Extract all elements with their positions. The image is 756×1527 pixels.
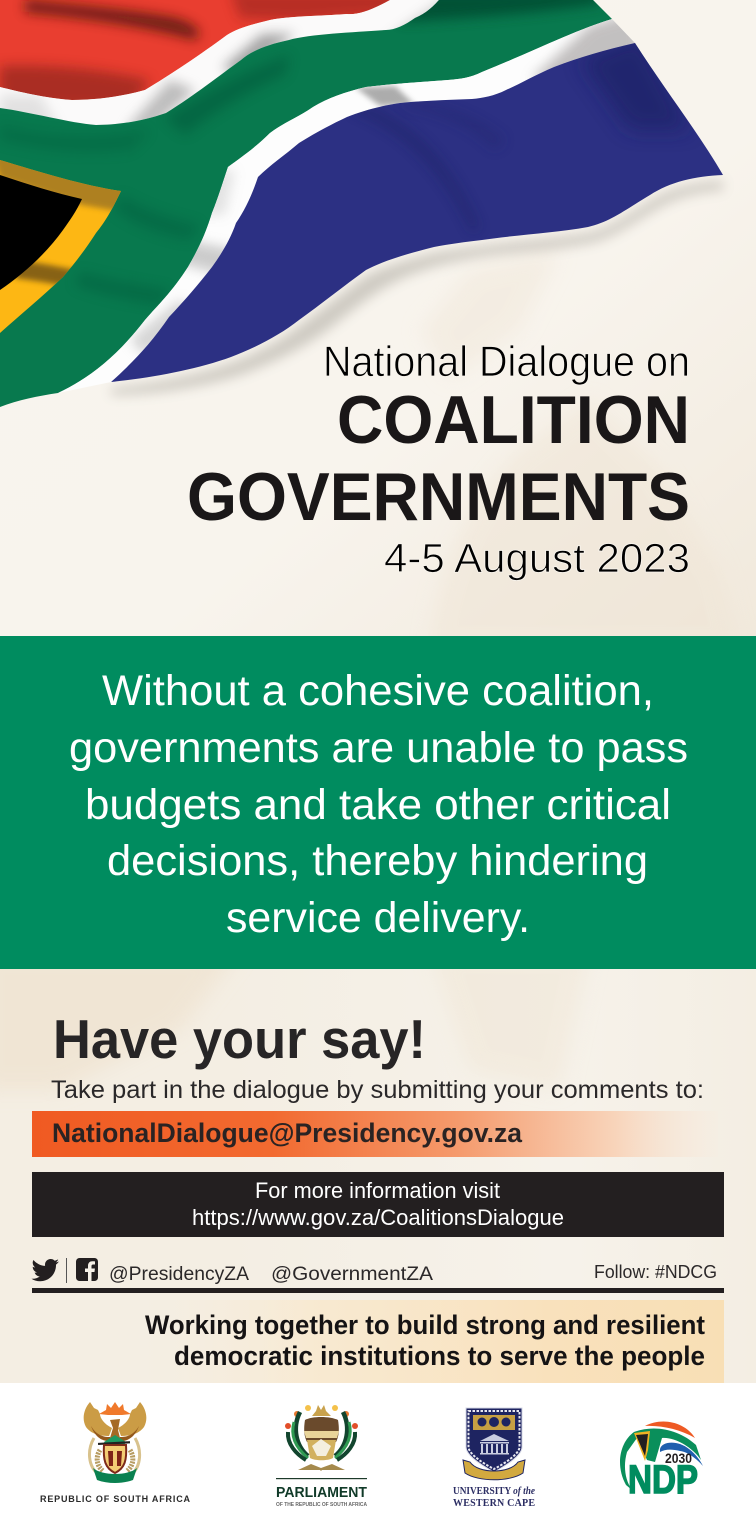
slogan line 1: Working together to build strong and resilient [145, 1310, 705, 1340]
parliament rule [276, 1478, 367, 1479]
statement text: Without a cohesive coalition, [102, 667, 654, 715]
uwc name line 2: WESTERN CAPE [453, 1498, 535, 1509]
panel: logos footer [0, 1383, 756, 1527]
flag: lower white stripe [58, 19, 635, 393]
arms bird [110, 1419, 120, 1438]
arms caption: REPUBLIC OF SOUTH AFRICA [40, 1494, 190, 1504]
handle: PresidencyZA: @PresidencyZA [109, 1264, 249, 1285]
arms ribbon [93, 1468, 137, 1483]
parliament subtitle: OF THE REPUBLIC OF SOUTH AFRICA [276, 1502, 367, 1508]
logo: University of the Western Cape [453, 1408, 536, 1509]
flag: red band [0, 0, 390, 100]
panel: slogan [140, 1300, 724, 1383]
icon: twitter [32, 1259, 59, 1281]
flag [0, 0, 730, 410]
website url: https://www.gov.za/CoalitionsDialogue [192, 1205, 564, 1230]
ndp gold chevron [634, 1431, 650, 1461]
email address: NationalDialogue@Presidency.gov.za [52, 1118, 523, 1148]
parliament sun [312, 1405, 331, 1416]
arms sun [99, 1402, 131, 1415]
parliament leaves [296, 1412, 347, 1456]
parliament name: PARLIAMENT [276, 1484, 367, 1501]
logo: Parliament [276, 1405, 367, 1508]
flag: green band [0, 0, 620, 410]
flag: blue band [100, 30, 730, 390]
ndp green ring [620, 1428, 701, 1490]
call to action heading: Have your say! [53, 1008, 426, 1070]
logo: Republic of South Africa [40, 1402, 190, 1504]
heading [187, 338, 690, 581]
slogan line 2: democratic institutions to serve the people [174, 1341, 705, 1371]
parliament book [298, 1464, 345, 1471]
heading: COALITION: COALITION [337, 382, 690, 458]
website label: For more information visit [255, 1178, 500, 1203]
ndp blue band [660, 1443, 703, 1466]
email bar [32, 1111, 718, 1157]
statement text [69, 667, 688, 942]
uwc shield [466, 1408, 522, 1472]
statement text: governments are unable to pass [69, 724, 688, 772]
ndp black triangle [636, 1434, 648, 1456]
social row [32, 1258, 717, 1285]
heading: intro line: National Dialogue on [323, 338, 690, 386]
uwc temple [480, 1434, 509, 1454]
flag: black triangle [0, 175, 82, 290]
ndp year: 2030 [665, 1450, 692, 1466]
hashtag: Follow: #NDCG [594, 1262, 717, 1282]
ndp orange arc [645, 1422, 695, 1438]
flag: upper white stripe [0, 0, 450, 130]
website bar [32, 1172, 724, 1237]
icon: facebook [76, 1258, 98, 1281]
heading: date: 4-5 August 2023 [384, 535, 690, 581]
arms wheat ring [89, 1438, 140, 1474]
flag shadow [111, 181, 723, 395]
flag: gold chevron [0, 160, 121, 333]
uwc name line 1: UNIVERSITY of the [453, 1486, 536, 1497]
divider [66, 1258, 67, 1283]
statement text: decisions, thereby hindering [107, 837, 648, 885]
handle: GovernmentZA: @GovernmentZA [271, 1264, 433, 1285]
panel: green statement [0, 636, 756, 969]
statement text: service delivery. [226, 894, 530, 942]
call to action subtext: Take part in the dialogue by submitting your comments to: [51, 1076, 704, 1104]
parliament dots [285, 1405, 358, 1429]
heading: GOVERNMENTS: GOVERNMENTS [187, 459, 690, 535]
paper background top [438, 420, 756, 636]
uwc gold chief [473, 1415, 515, 1430]
arms shield [104, 1445, 126, 1473]
ndp letters: NDP [628, 1458, 698, 1502]
paper background bottom [0, 969, 560, 1096]
statement text: budgets and take other critical [85, 781, 671, 829]
arms wings [84, 1402, 146, 1436]
logo: NDP 2030 [620, 1422, 703, 1502]
uwc ribbon [463, 1460, 525, 1480]
rule [32, 1288, 724, 1293]
arms protea [104, 1435, 126, 1450]
parliament pot [304, 1417, 339, 1442]
